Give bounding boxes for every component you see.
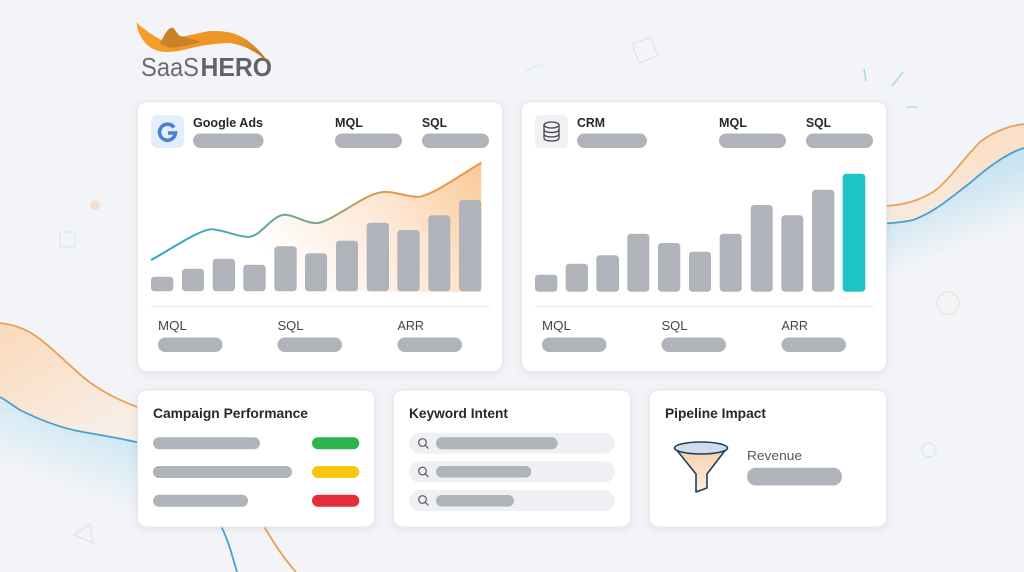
search row 1 — [409, 433, 615, 454]
metric: MQL: MQL — [542, 318, 571, 333]
bar chart: CRM — [535, 174, 865, 292]
panel: Campaign Performance — [138, 390, 374, 527]
right background wave — [880, 124, 1024, 320]
left background wave — [0, 323, 296, 572]
logo: SaaSHERO: HERO — [200, 52, 272, 82]
label: Revenue: Revenue — [747, 448, 802, 463]
header: SQL — [422, 116, 489, 148]
icon: funnel — [674, 442, 728, 492]
bar chart: Google Ads — [151, 200, 481, 291]
header: SQL: SQL — [422, 116, 447, 130]
metric: SQL: SQL — [662, 318, 688, 333]
header: CRM — [577, 116, 647, 148]
header: MQL — [719, 116, 786, 148]
metric: ARR: ARR — [782, 318, 808, 333]
header: CRM: CRM — [577, 116, 605, 130]
metric: SQL: SQL — [278, 318, 304, 333]
search row 2 — [409, 461, 615, 482]
icon: database — [535, 115, 568, 148]
logo: SaaSHERO: SaaS — [141, 52, 199, 82]
header: SQL — [806, 116, 873, 148]
metric: ARR — [782, 318, 846, 352]
metric: MQL — [542, 318, 606, 352]
header: MQL — [335, 116, 402, 148]
panel: Google Ads — [138, 102, 502, 372]
header: MQL: MQL — [335, 116, 363, 130]
heading: Pipeline Impact — [665, 405, 766, 421]
header: Google Ads — [193, 116, 264, 148]
logo fold — [160, 28, 201, 48]
heading: Campaign Performance — [153, 405, 308, 421]
label: Revenue — [747, 448, 842, 486]
area and line chart — [151, 163, 481, 292]
panel: CRM — [522, 102, 886, 372]
header: SQL: SQL — [806, 116, 831, 130]
decorative shapes — [60, 37, 959, 543]
icon: Google G — [151, 115, 184, 148]
metric: ARR — [398, 318, 462, 352]
search row 3 — [409, 490, 615, 511]
header: Google Ads: Google Ads — [193, 116, 263, 130]
panel: Pipeline Impact — [650, 390, 886, 527]
heading: Keyword Intent — [409, 405, 508, 421]
metric: MQL: MQL — [158, 318, 187, 333]
metric: SQL — [662, 318, 726, 352]
metric: ARR: ARR — [398, 318, 424, 333]
logo: SaaSHERO — [137, 22, 272, 82]
campaign rows — [153, 437, 359, 507]
metric: MQL — [158, 318, 222, 352]
metric: SQL — [278, 318, 342, 352]
panel: Keyword Intent — [394, 390, 630, 527]
header: MQL: MQL — [719, 116, 747, 130]
